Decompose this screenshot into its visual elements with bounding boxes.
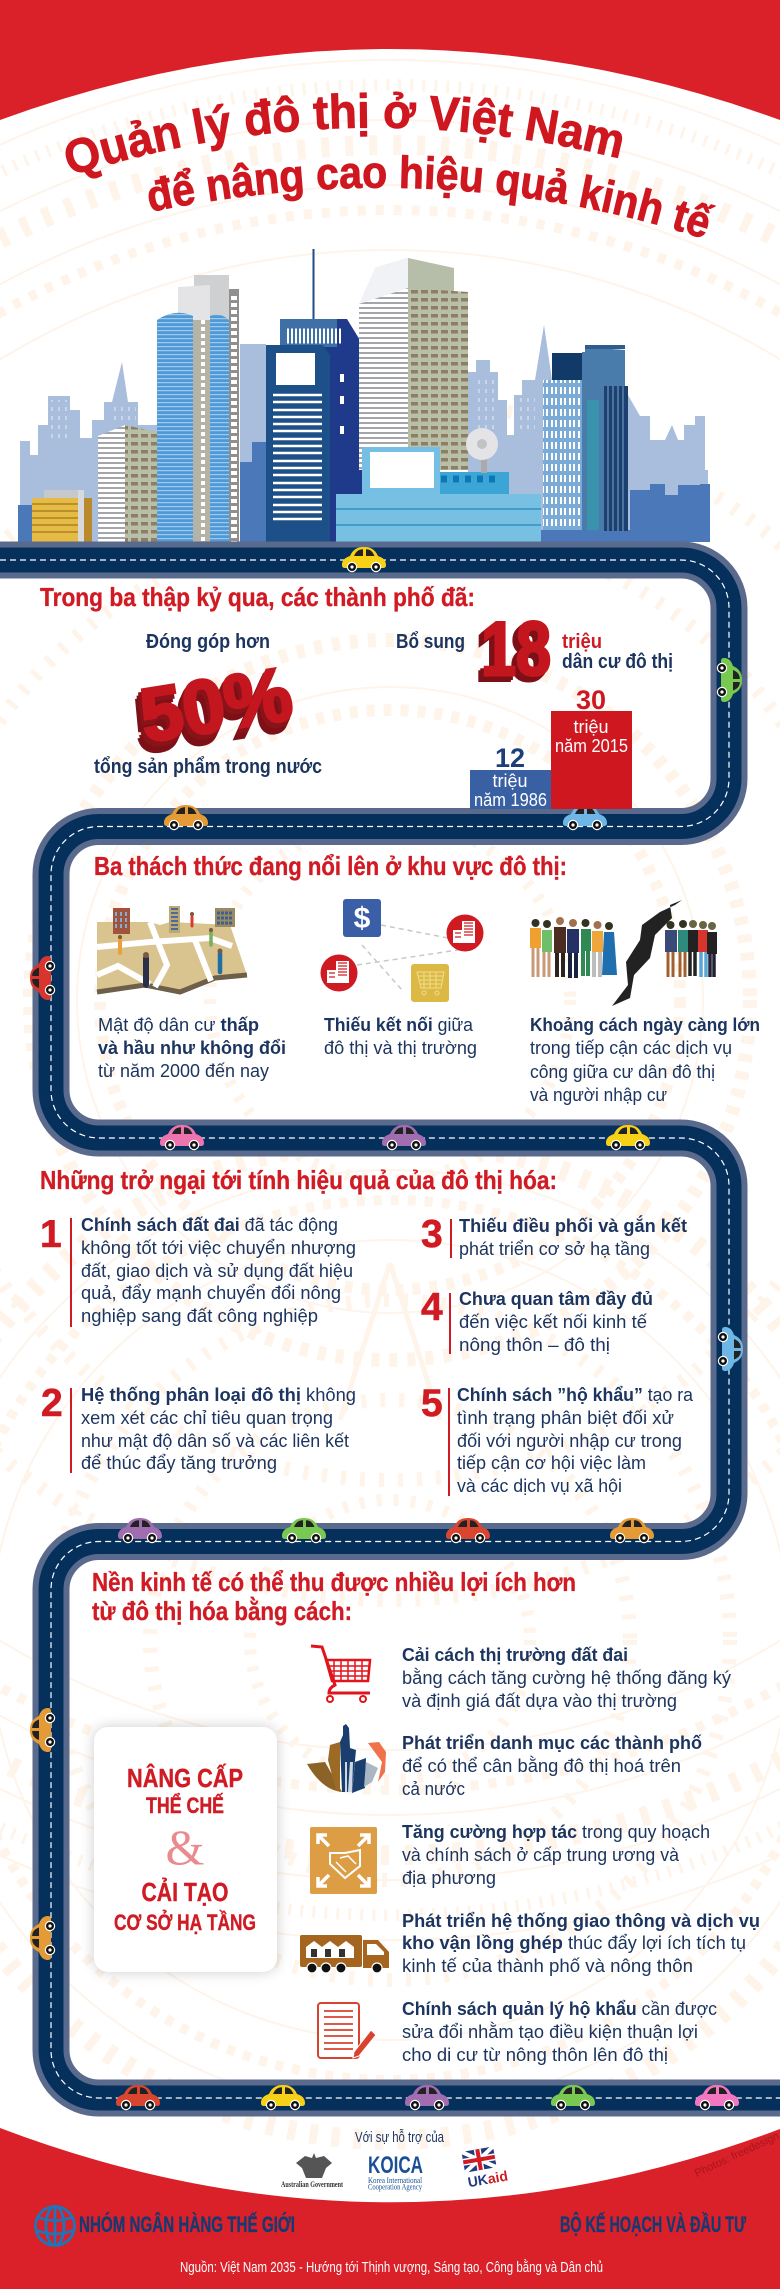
grey office tower <box>359 258 468 470</box>
bar 1986 <box>470 743 551 810</box>
benefit 1 <box>311 1644 732 1711</box>
bar 2015: triệu <box>573 717 609 737</box>
million urban residents label: triệu <box>562 631 602 653</box>
obstacle 5: 5 <box>421 1382 443 1425</box>
white and tan building <box>98 425 157 542</box>
panel: benefits <box>92 1567 760 2065</box>
obstacle 5: tình trạng phân biệt đối xử <box>457 1407 674 1428</box>
icon: delivery truck <box>300 1935 389 1973</box>
heading <box>92 1567 576 1626</box>
obstacle 2: như mật độ dân số và các liên kết <box>81 1430 349 1451</box>
obstacle 4: 4 <box>421 1286 443 1329</box>
card: institutions and infrastructure: NÂNG CẤP <box>127 1763 243 1793</box>
text: low density: từ năm 2000 đến nay <box>98 1060 270 1081</box>
obstacle 1: nghiệp sang đất công nghiệp <box>81 1305 318 1326</box>
obstacle 3: Thiếu điều phối và gắn kết <box>459 1215 687 1236</box>
obstacle 3 <box>421 1213 687 1259</box>
text: lack of connectivity: Thiếu kết nối giữa <box>324 1014 474 1035</box>
city skyline <box>18 249 710 542</box>
navy tower <box>266 249 366 542</box>
obstacle 4 <box>421 1286 653 1355</box>
obstacle 5: và các dịch vụ xã hội <box>457 1475 622 1496</box>
heading: Nền kinh tế có thể thu được nhiều lợi ích hơn <box>92 1567 576 1597</box>
18 number: 18 <box>476 612 546 697</box>
bar 2015: 30 <box>576 685 606 715</box>
yellow building <box>32 490 92 542</box>
obstacle 2: để thúc đẩy tăng trưởng <box>81 1452 277 1473</box>
bar 2015 <box>551 685 632 809</box>
logo: KOICA: Korea International <box>368 2176 423 2185</box>
obstacle 2: 2 <box>41 1382 63 1425</box>
bar 1986: năm 1986 <box>474 790 547 810</box>
obstacle 2 <box>41 1382 356 1473</box>
icon: handshake square <box>310 1827 377 1894</box>
text: lack of connectivity: đô thị và thị trường <box>324 1037 477 1058</box>
50% number: 50% <box>134 651 298 759</box>
benefit 4 <box>300 1910 760 1976</box>
benefit 5: cho di cư từ nông thôn lên đô thị <box>402 2044 668 2065</box>
logo: KOICA: KOICA <box>368 2152 423 2179</box>
bar chart <box>470 685 632 810</box>
benefit 3: và chính sách ở cấp trung ương và <box>402 1844 680 1865</box>
obstacle 4: đến việc kết nối kinh tế <box>459 1311 648 1332</box>
obstacle 3: 3 <box>421 1213 443 1256</box>
road <box>0 560 780 2098</box>
bar 2015: năm 2015 <box>555 736 628 756</box>
obstacle 1: 1 <box>40 1213 62 1256</box>
obstacle 5 <box>421 1382 694 1496</box>
benefit 3 <box>310 1821 710 1894</box>
cars <box>30 547 743 2110</box>
obstacle 5: đối với người nhập cư trong <box>457 1430 682 1451</box>
obstacle 3: phát triển cơ sở hạ tầng <box>459 1238 650 1259</box>
benefit 2: để có thể cân bằng đô thị hoá trên <box>402 1755 681 1776</box>
heading: từ đô thị hóa bằng cách: <box>92 1596 352 1626</box>
text: lack of connectivity <box>324 1014 477 1058</box>
top red banner <box>0 0 780 120</box>
benefit 5: sửa đổi nhằm tạo điều kiện thuận lợi <box>402 2021 698 2042</box>
18 number: 18 <box>478 610 548 695</box>
GDP contribution label: Đóng góp hơn <box>146 631 270 653</box>
card: institutions and infrastructure: THỂ CHẾ <box>146 1793 224 1818</box>
logo: KOICA: Cooperation Agency <box>368 2182 422 2192</box>
crack <box>612 900 682 1006</box>
benefit 3: địa phương <box>402 1867 496 1888</box>
obstacle 1: đất, giao dịch và sử dụng đất hiệu <box>81 1260 353 1281</box>
benefit 2: cả nước <box>402 1778 465 1799</box>
panel: three challenges <box>94 851 760 1105</box>
icon: dollar square: $ <box>354 902 371 935</box>
50% number: 50% <box>129 662 293 770</box>
obstacle 1: quả, đẩy mạnh chuyển đổi nông <box>81 1282 341 1303</box>
benefit 3: Tăng cường hợp tác trong quy hoạch <box>402 1821 710 1842</box>
logo: UKaid <box>461 2145 509 2190</box>
text: low density: và hầu như không đổi <box>98 1037 286 1058</box>
bar 1986: triệu <box>492 771 528 791</box>
background skyline <box>20 325 708 542</box>
icon: globe <box>36 2206 74 2246</box>
logo: UKaid: UKaid <box>466 2167 509 2190</box>
obstacle 4: Chưa quan tâm đầy đủ <box>459 1288 653 1309</box>
heading: Những trở ngại tới tính hiệu quả của đô thị hóa: <box>40 1165 557 1195</box>
icon: city map with people <box>97 906 247 992</box>
text: growing gap: và người nhập cư <box>530 1084 667 1105</box>
million urban residents label <box>562 631 673 673</box>
low blue building with dish <box>336 428 541 542</box>
card: institutions and infrastructure: CƠ SỞ HẠ TẦNG <box>114 1910 256 1935</box>
benefit 5: Chính sách quản lý hộ khẩu cần được <box>402 1998 717 2019</box>
added population label: Bổ sung <box>396 631 465 653</box>
obstacle 1 <box>40 1213 356 1327</box>
text: growing gap: Khoảng cách ngày càng lớn <box>530 1014 760 1035</box>
icon: document with pencil <box>318 2003 376 2058</box>
benefit 2 <box>307 1724 702 1799</box>
text: growing gap: công giữa cư dân đô thị <box>530 1061 715 1082</box>
benefit 4: kinh tế của thành phố và nông thôn <box>402 1955 693 1976</box>
bottom red banner <box>0 2128 780 2289</box>
obstacle 5: Chính sách ”hộ khẩu” tạo ra <box>457 1384 694 1405</box>
photo credit: Photos: freedesign <box>693 2130 780 2180</box>
50% number: 50% <box>131 659 294 767</box>
logo: World Bank Group: NHÓM NGÂN HÀNG THẾ GIỚI <box>79 2212 295 2237</box>
source line: Nguồn: Việt Nam 2035 - Hướng tới Thịnh vượng, Sáng tạo, Công bằng và Dân chủ <box>180 2259 603 2276</box>
text: growing gap <box>530 1014 760 1105</box>
benefit 1: bằng cách tăng cường hệ thống đăng ký <box>402 1667 732 1688</box>
card: institutions and infrastructure: & <box>166 1819 204 1875</box>
obstacle 2: xem xét các chỉ tiêu quan trọng <box>81 1407 333 1428</box>
obstacle 1: không tốt tới việc chuyển nhượng <box>81 1237 356 1258</box>
icon: shopping cart <box>311 1646 370 1702</box>
sponsor label: Với sự hỗ trợ của <box>355 2129 444 2146</box>
obstacle 1: Chính sách đất đai đã tác động <box>81 1214 338 1235</box>
million urban residents label: dân cư đô thị <box>562 651 673 673</box>
icon: people divided by crack <box>530 900 717 1006</box>
right blue tower <box>543 345 628 531</box>
icon: city globe <box>307 1724 386 1793</box>
benefit 2: Phát triển danh mục các thành phố <box>402 1732 702 1753</box>
logo: World Bank Group <box>36 2206 295 2246</box>
benefit 4: Phát triển hệ thống giao thông và dịch vụ <box>402 1910 760 1931</box>
title line 2: để nâng cao hiệu quả kinh tế <box>148 154 716 238</box>
18 number: 18 <box>481 607 551 692</box>
darker front skyline <box>18 442 710 542</box>
benefit 1: và định giá đất dựa vào thị trường <box>402 1690 677 1711</box>
obstacle 5: tiếp cận cơ hội việc làm <box>457 1452 646 1473</box>
logo: Australian Government: Australian Government <box>281 2179 343 2189</box>
title line 1: Quản lý đô thị ở Việt Nam <box>66 92 622 178</box>
text: low density: Mật độ dân cư thấp <box>98 1014 259 1035</box>
blue glass tower <box>157 275 239 542</box>
benefit 4: kho vận lồng ghép thúc đẩy lợi ích tích tụ <box>402 1932 746 1953</box>
heading: Ba thách thức đang nổi lên ở khu vực đô thị: <box>94 851 567 881</box>
text: growing gap: trong tiếp cận các dịch vụ <box>530 1037 732 1058</box>
footer: sponsors <box>281 2129 780 2192</box>
benefit 1: Cải cách thị trường đất đai <box>402 1644 628 1665</box>
obstacle 4: nông thôn – đô thị <box>459 1334 610 1355</box>
GDP label: tổng sản phẩm trong nước <box>94 756 322 778</box>
title <box>66 92 716 238</box>
panel: cities in three decades <box>40 582 673 810</box>
icon: dollar square <box>343 899 381 937</box>
heading: Trong ba thập kỷ qua, các thành phố đã: <box>40 582 475 612</box>
icon: disconnected market <box>320 899 484 1002</box>
50% number: 50% <box>132 656 296 764</box>
obstacle 2: Hệ thống phân loại đô thị không <box>81 1384 356 1405</box>
panel: obstacles <box>40 1165 694 1496</box>
text: low density <box>98 1014 286 1081</box>
bar 1986: 12 <box>495 743 525 773</box>
benefit 5 <box>318 1998 717 2065</box>
card: institutions and infrastructure: CẢI TẠO <box>142 1877 228 1907</box>
icon: yellow cart square <box>411 964 449 1002</box>
card: institutions and infrastructure <box>94 1727 277 1972</box>
logo: KOICA <box>368 2152 423 2192</box>
logo: Australian Government <box>281 2153 343 2189</box>
